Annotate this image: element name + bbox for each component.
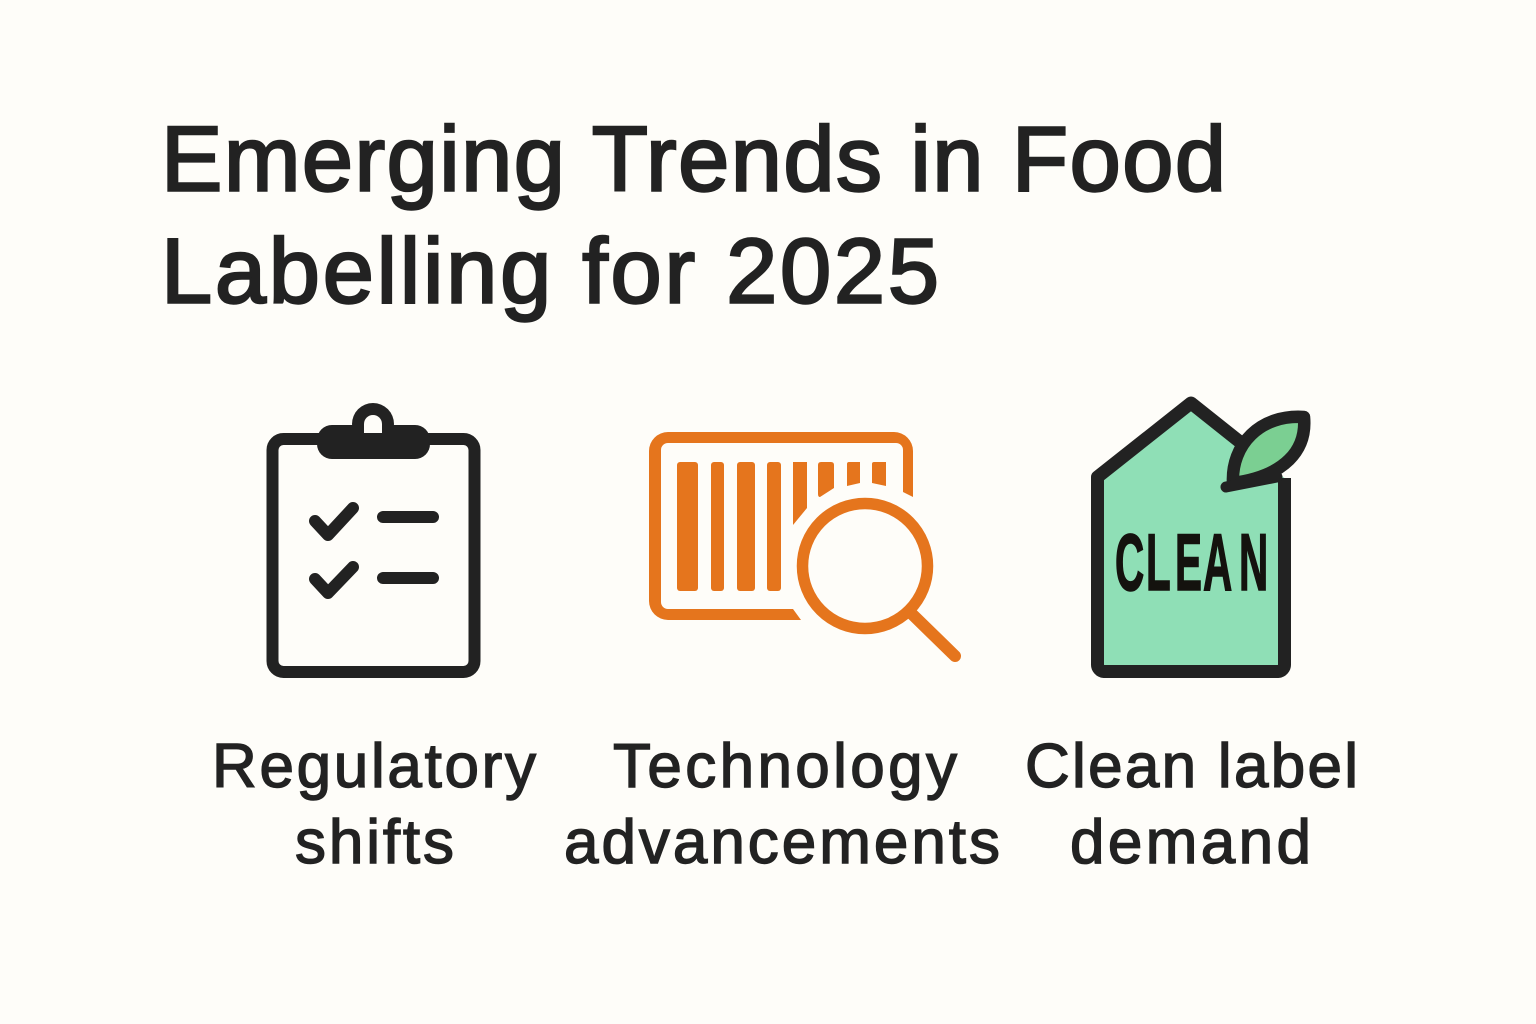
- label: technology advancements: [564, 732, 1000, 877]
- label: regulatory shifts: [212, 732, 536, 877]
- label: regulatory shifts: shifts: [295, 808, 454, 877]
- icon: clipboard checklist: [272, 403, 474, 672]
- label: technology advancements: Technology: [613, 732, 957, 801]
- label: clean label demand: [1025, 732, 1358, 877]
- title: Labelling for 2025: [161, 220, 939, 322]
- label: technology advancements: advancements: [564, 808, 1000, 877]
- icon: clean label tag with leaf: CLEAN: [1115, 517, 1268, 608]
- icon: barcode with magnifying glass: [649, 432, 955, 656]
- label: regulatory shifts: Regulatory: [212, 732, 536, 801]
- icon: clean label tag with leaf: [1097, 403, 1304, 672]
- title: Emerging Trends in Food: [161, 108, 1226, 210]
- label: clean label demand: demand: [1070, 808, 1311, 877]
- label: clean label demand: Clean label: [1025, 732, 1358, 801]
- title: [161, 108, 1226, 322]
